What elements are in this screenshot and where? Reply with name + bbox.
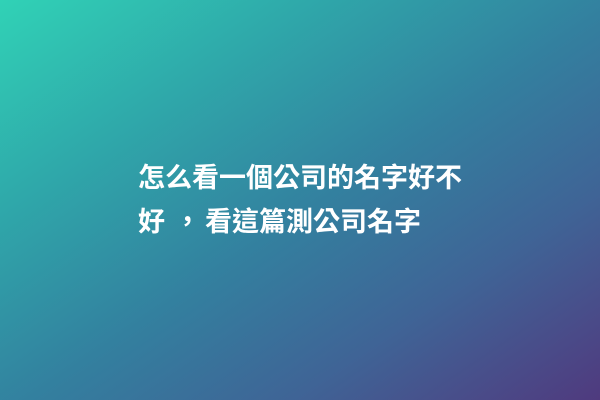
title line 1: 怎么看一個公司的名字好不 <box>138 163 462 193</box>
title line 2 continued: 看這篇測公司名字 <box>205 207 421 237</box>
title <box>138 163 462 237</box>
title line 2 comma: ， <box>174 207 201 237</box>
title line 2: 好 <box>138 207 165 237</box>
